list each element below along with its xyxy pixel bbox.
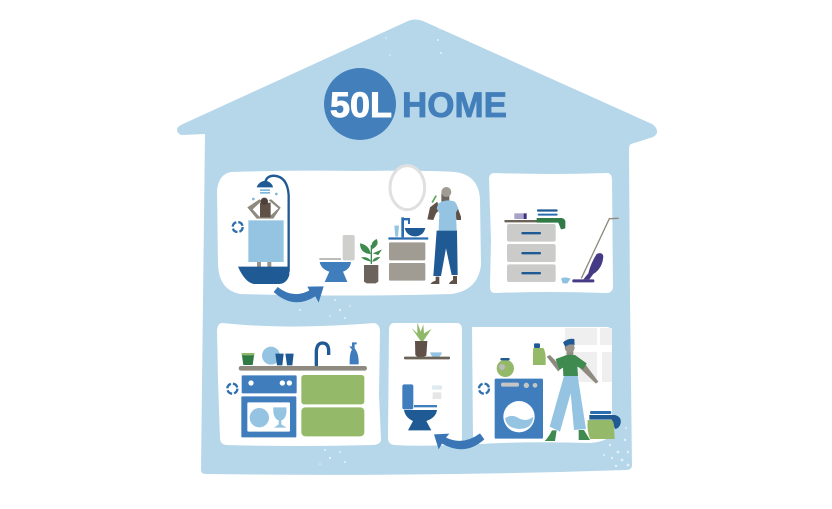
arrow to toilet <box>274 286 324 303</box>
bowl on shelf <box>430 352 442 358</box>
storage scene <box>504 209 619 283</box>
vanity unit <box>388 217 428 281</box>
panel: bedroom storage <box>489 173 613 293</box>
shelf items <box>242 347 294 365</box>
badge circle <box>324 68 396 140</box>
wall speckles <box>299 28 629 467</box>
spray bottle <box>349 342 359 364</box>
figure <box>427 202 439 220</box>
potted plant <box>360 239 382 283</box>
toilet <box>402 384 437 430</box>
detergent pot <box>497 358 514 377</box>
chest top <box>504 220 558 222</box>
shelf <box>404 357 450 359</box>
toilet paper <box>432 385 442 399</box>
oven control panel <box>242 375 297 393</box>
person <box>545 339 598 441</box>
icon: recycle laundry <box>479 384 489 394</box>
bathroom scene left <box>233 166 428 303</box>
kitchen scene <box>227 342 367 437</box>
panel: bathroom <box>217 171 481 296</box>
window in laundry room <box>565 328 612 382</box>
panel: toilet room <box>388 323 462 446</box>
bathtub <box>238 267 289 284</box>
badge text: 50L <box>330 86 392 125</box>
title: 50L HOME <box>324 68 507 140</box>
house silhouette <box>177 20 657 475</box>
folded laundry <box>587 411 621 439</box>
green cabinets <box>301 375 364 436</box>
icon: recycle shower <box>233 222 243 232</box>
laundry scene <box>434 339 621 449</box>
water drops <box>252 189 278 200</box>
shower head <box>257 181 273 187</box>
icon: recycle kitchen <box>227 384 237 394</box>
vacuum cleaner <box>561 218 619 283</box>
heading text: HOME <box>402 86 507 125</box>
detergent bottle <box>533 343 546 365</box>
folded towels <box>537 209 565 229</box>
drawers <box>507 224 556 282</box>
washing machine <box>495 379 543 439</box>
toilet room scene <box>402 322 450 430</box>
small boxes <box>514 213 524 219</box>
panel: kitchen <box>217 323 381 446</box>
oven with dishes <box>241 396 296 437</box>
shower pipe <box>265 176 289 272</box>
person showering <box>247 198 281 268</box>
plant on shelf <box>411 322 431 357</box>
person brushing teeth <box>427 187 461 284</box>
shower curtain <box>248 220 284 262</box>
mirror <box>390 166 425 210</box>
arrow to toilet <box>434 433 484 449</box>
counter <box>239 366 367 371</box>
panel: laundry room <box>472 327 612 444</box>
toilet <box>319 235 355 282</box>
faucet <box>316 343 329 366</box>
